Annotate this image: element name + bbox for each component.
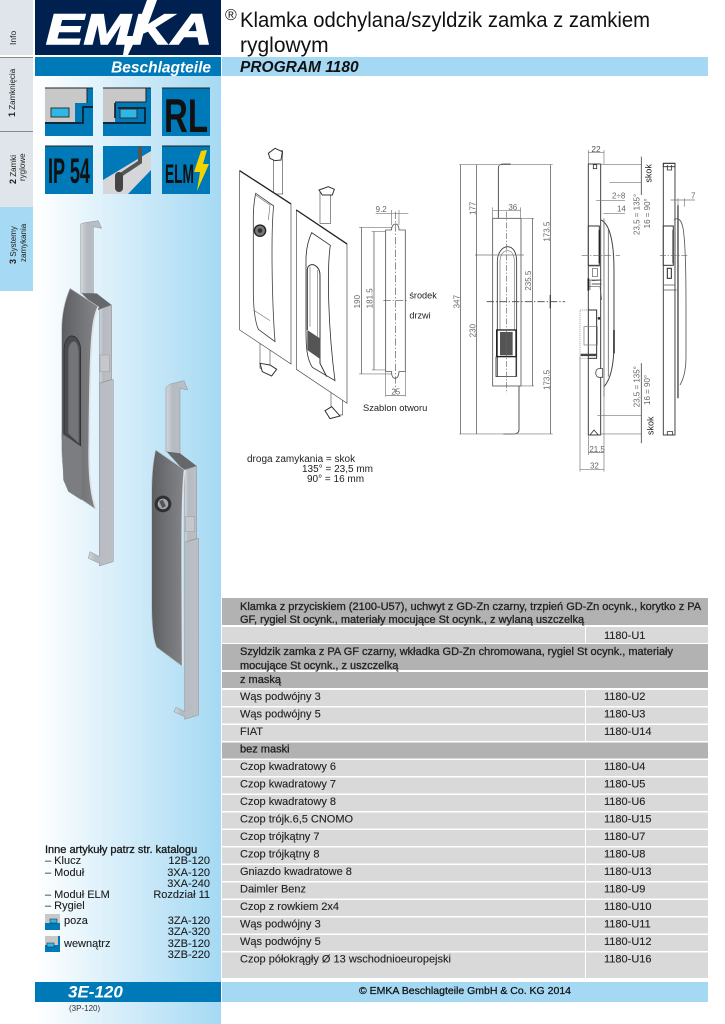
drawing: front view bbox=[452, 164, 565, 434]
header band: Beschlagteile bbox=[35, 57, 221, 76]
text: closing travel note bbox=[247, 454, 373, 485]
title bbox=[225, 7, 650, 57]
drawing: side view with dimensions: 14 bbox=[617, 204, 626, 213]
row: 1180-U7 bbox=[604, 831, 645, 843]
tab: Zamki ryglowe: ryglowe bbox=[18, 153, 27, 181]
drawing: side view with dimensions: 22 bbox=[591, 144, 601, 154]
row: Gniazdo kwadratowe 8 bbox=[240, 866, 352, 878]
title: ryglowym bbox=[240, 34, 329, 57]
row: handle description: Klamka z przyciskiem (2100-U57), uchwyt z GD-Zn czarny, trzpień GD-Zn ocynk., korytko z PA bbox=[240, 601, 702, 613]
logo: EMKA: EMKA bbox=[46, 6, 212, 54]
icon: ELM lightning bbox=[162, 146, 210, 194]
tab: Zamki ryglowe bbox=[0, 131, 33, 207]
row: 1180-U12 bbox=[604, 936, 652, 948]
drawing: front view: 347 bbox=[452, 294, 461, 308]
row bbox=[222, 830, 708, 846]
row: 1180-U9 bbox=[604, 884, 645, 896]
row bbox=[222, 865, 708, 881]
row: 1180-U8 bbox=[604, 848, 645, 860]
drawing: side view with dimensions: 16 = 90° bbox=[643, 198, 652, 228]
row bbox=[222, 725, 708, 741]
header band: Beschlagteile: Beschlagteile bbox=[111, 60, 211, 76]
icon: IP 54: IP 54 bbox=[48, 152, 90, 191]
row bbox=[222, 918, 708, 934]
drawing: hole template bbox=[353, 205, 437, 413]
text: old page reference: (3P-120) bbox=[69, 1004, 100, 1013]
text block: other catalogue articles: Rozdział 11 bbox=[153, 889, 210, 901]
drawing: side view with dimensions: skok bbox=[645, 416, 655, 435]
row: Czop trójkątny 8 bbox=[240, 848, 319, 860]
drawing: side view with dimensions: 23,5 = 135° bbox=[632, 194, 641, 235]
row: 1180-U16 bbox=[604, 954, 652, 966]
header band: program bbox=[222, 57, 708, 76]
row: handle description bbox=[222, 598, 708, 626]
row bbox=[222, 935, 708, 951]
drawing: grip version bbox=[296, 187, 347, 419]
row: Czop kwadratowy 6 bbox=[240, 761, 336, 773]
icon: ELM lightning: ELM bbox=[165, 159, 194, 189]
navigation tabs bbox=[0, 0, 33, 291]
text block: other catalogue articles: 3ZB-120 bbox=[168, 938, 210, 950]
row: Czop trójkątny 7 bbox=[240, 831, 319, 843]
row bbox=[222, 882, 708, 898]
row: 1180-U15 bbox=[604, 814, 652, 826]
text: closing travel note: 90° = 16 mm bbox=[307, 474, 364, 485]
row: Daimler Benz bbox=[240, 884, 306, 896]
text block: other catalogue articles: Inne artykuły patrz str. katalogu bbox=[45, 844, 197, 856]
row: z maską bbox=[222, 672, 708, 688]
row: lock plate description: mocujące St ocynk., z uszczelką bbox=[240, 660, 399, 672]
row: 1180-U5 bbox=[604, 778, 645, 790]
footer band: copyright: © EMKA Beschlagteile GmbH & Co. KG 2014 bbox=[359, 985, 571, 997]
drawing: hole template: 25 bbox=[391, 387, 401, 396]
technical drawing: isometric views and drilling template bbox=[240, 148, 437, 419]
text block: other catalogue articles: – Moduł bbox=[45, 867, 85, 879]
spec table bbox=[222, 598, 708, 978]
drawing: front view: 177 bbox=[468, 201, 477, 215]
logo: EMKA bbox=[35, 0, 221, 55]
drawing: side view with dimensions: 21.5 bbox=[589, 445, 605, 454]
row: lock plate description: Szyldzik zamka z PA GF czarny, wkładka GD-Zn chromowana, rygiel St ocynk., materiały bbox=[240, 646, 674, 658]
row: 1180-U3 bbox=[604, 708, 645, 720]
text block: other catalogue articles: – Rygiel bbox=[45, 900, 85, 912]
row bbox=[222, 900, 708, 916]
text: closing travel note: droga zamykania = skok bbox=[247, 454, 356, 465]
feature icons bbox=[45, 88, 210, 194]
row: Czop kwadratowy 8 bbox=[240, 796, 336, 808]
drawing: second side view: 7 bbox=[691, 192, 696, 201]
sidebar background bbox=[35, 76, 221, 1024]
product photo: handle with grip bbox=[62, 221, 113, 566]
row bbox=[222, 760, 708, 776]
row: Czop trójk.6,5 CNOMO bbox=[240, 814, 354, 826]
row: handle description: GF, rygiel St ocynk., materiały mocujące St ocynk., z wylaną uszczelką bbox=[240, 614, 585, 626]
drawing: hole template: 9.2 bbox=[376, 205, 387, 214]
row: Wąs podwójny 5 bbox=[240, 708, 321, 720]
drawing: side view with dimensions: skok bbox=[644, 164, 654, 183]
drawing: side view with dimensions: 23,5 = 135° bbox=[632, 366, 641, 407]
drawing: side view with dimensions: 16 = 90° bbox=[643, 375, 652, 405]
text block: other catalogue articles: – Moduł ELM bbox=[45, 889, 110, 901]
text block: other catalogue articles: 3ZA-320 bbox=[168, 926, 210, 938]
header band: program: PROGRAM 1180 bbox=[240, 59, 359, 76]
row: Wąs podwójny 5 bbox=[240, 936, 321, 948]
title: ® bbox=[225, 7, 237, 24]
drawing: side view with dimensions: 32 bbox=[590, 462, 599, 471]
drawing: front view: 36 bbox=[508, 203, 518, 212]
row bbox=[222, 952, 708, 978]
row: 1180-U1 bbox=[222, 627, 708, 643]
tab: Systemy zamykania: 3 Systemy bbox=[8, 226, 18, 264]
icon: outside bbox=[45, 914, 60, 930]
text block: other catalogue articles: wewnątrz bbox=[63, 938, 110, 950]
row: 1180-U13 bbox=[604, 866, 652, 878]
drawing: side view with dimensions: 2÷8 bbox=[612, 191, 626, 200]
drawing: hole template: 190 bbox=[353, 294, 362, 308]
tab: Info bbox=[0, 0, 33, 55]
icon: inside bbox=[45, 936, 60, 952]
row: Czop półokrągły Ø 13 wschodnioeuropejski bbox=[240, 954, 451, 966]
row: FIAT bbox=[240, 726, 263, 738]
text block: other catalogue articles: poza bbox=[64, 915, 89, 927]
tab: Zamknięcia bbox=[0, 57, 33, 131]
icon: outside seal bbox=[45, 88, 93, 136]
drawing: front view: 230 bbox=[468, 323, 477, 337]
row bbox=[222, 778, 708, 794]
icon: sealing profile bbox=[103, 146, 151, 194]
tab: Systemy zamykania bbox=[0, 207, 33, 291]
icon: RL: RL bbox=[164, 89, 208, 142]
drawing: front view: 173.5 bbox=[542, 221, 551, 242]
footer band: copyright bbox=[222, 982, 708, 1002]
drawing: front view: 235.5 bbox=[524, 270, 533, 291]
row: 1180-U2 bbox=[604, 691, 645, 703]
drawing: hole template: drzwi bbox=[409, 311, 431, 321]
row: bez maski: bez maski bbox=[240, 744, 290, 756]
row bbox=[222, 690, 708, 706]
tab: Zamki ryglowe: 2 Zamki bbox=[8, 155, 18, 184]
row: Wąs podwójny 3 bbox=[240, 691, 321, 703]
row: 1180-U10 bbox=[604, 901, 652, 913]
text block: other catalogue articles: 12B-120 bbox=[168, 855, 210, 867]
row: Wąs podwójny 3 bbox=[240, 918, 321, 930]
tab: Zamknięcia: 1 Zamknięcia bbox=[7, 68, 17, 117]
text block: other catalogue articles: – Klucz bbox=[45, 855, 81, 867]
icon: IP 54 bbox=[45, 146, 93, 194]
row: bez maski bbox=[222, 742, 708, 758]
drawing: side view with dimensions bbox=[580, 144, 655, 472]
row: Czop kwadratowy 7 bbox=[240, 778, 336, 790]
text block: other catalogue articles: 3XA-240 bbox=[167, 878, 210, 890]
row: 1180-U1: 1180-U1 bbox=[604, 630, 645, 642]
row: 1180-U4 bbox=[604, 761, 645, 773]
text block: other catalogue articles: 3XA-120 bbox=[167, 867, 210, 879]
row: 1180-U11 bbox=[604, 918, 651, 930]
row bbox=[222, 795, 708, 811]
drawing: hole template: 181.5 bbox=[365, 288, 374, 308]
drawing: second side view bbox=[660, 163, 696, 435]
footer band: page number: 3E-120 bbox=[68, 982, 123, 1002]
text: closing travel note: 135° = 23,5 mm bbox=[302, 464, 373, 475]
text block: other catalogue articles: 3ZB-220 bbox=[168, 949, 210, 961]
row: 1180-U14 bbox=[604, 726, 652, 738]
text block: other catalogue articles: 3ZA-120 bbox=[168, 915, 210, 927]
icon: inside seal bbox=[103, 88, 151, 136]
drawing: hole template: Szablon otworu bbox=[363, 403, 427, 413]
product photo: handle with lock bbox=[152, 381, 199, 719]
row: lock plate description bbox=[222, 644, 708, 672]
row bbox=[222, 848, 708, 864]
text block: other catalogue articles bbox=[45, 844, 210, 961]
title: Klamka odchylana/szyldzik zamka z zamkiem bbox=[240, 9, 650, 32]
drawing: front view: 173.5 bbox=[542, 369, 551, 390]
row bbox=[222, 708, 708, 724]
row: Czop z rowkiem 2x4 bbox=[240, 901, 339, 913]
footer band: page number bbox=[35, 982, 221, 1002]
row: 1180-U6 bbox=[604, 796, 645, 808]
tab: Systemy zamykania: zamykania bbox=[19, 223, 28, 262]
drawing: hole template: środek bbox=[409, 291, 437, 301]
tab: Info: Info bbox=[8, 31, 18, 45]
row: z maską: z maską bbox=[240, 674, 282, 686]
technical drawing: front and side dimensions bbox=[452, 144, 696, 472]
row bbox=[222, 812, 708, 828]
drawing: lock version bbox=[240, 148, 291, 376]
